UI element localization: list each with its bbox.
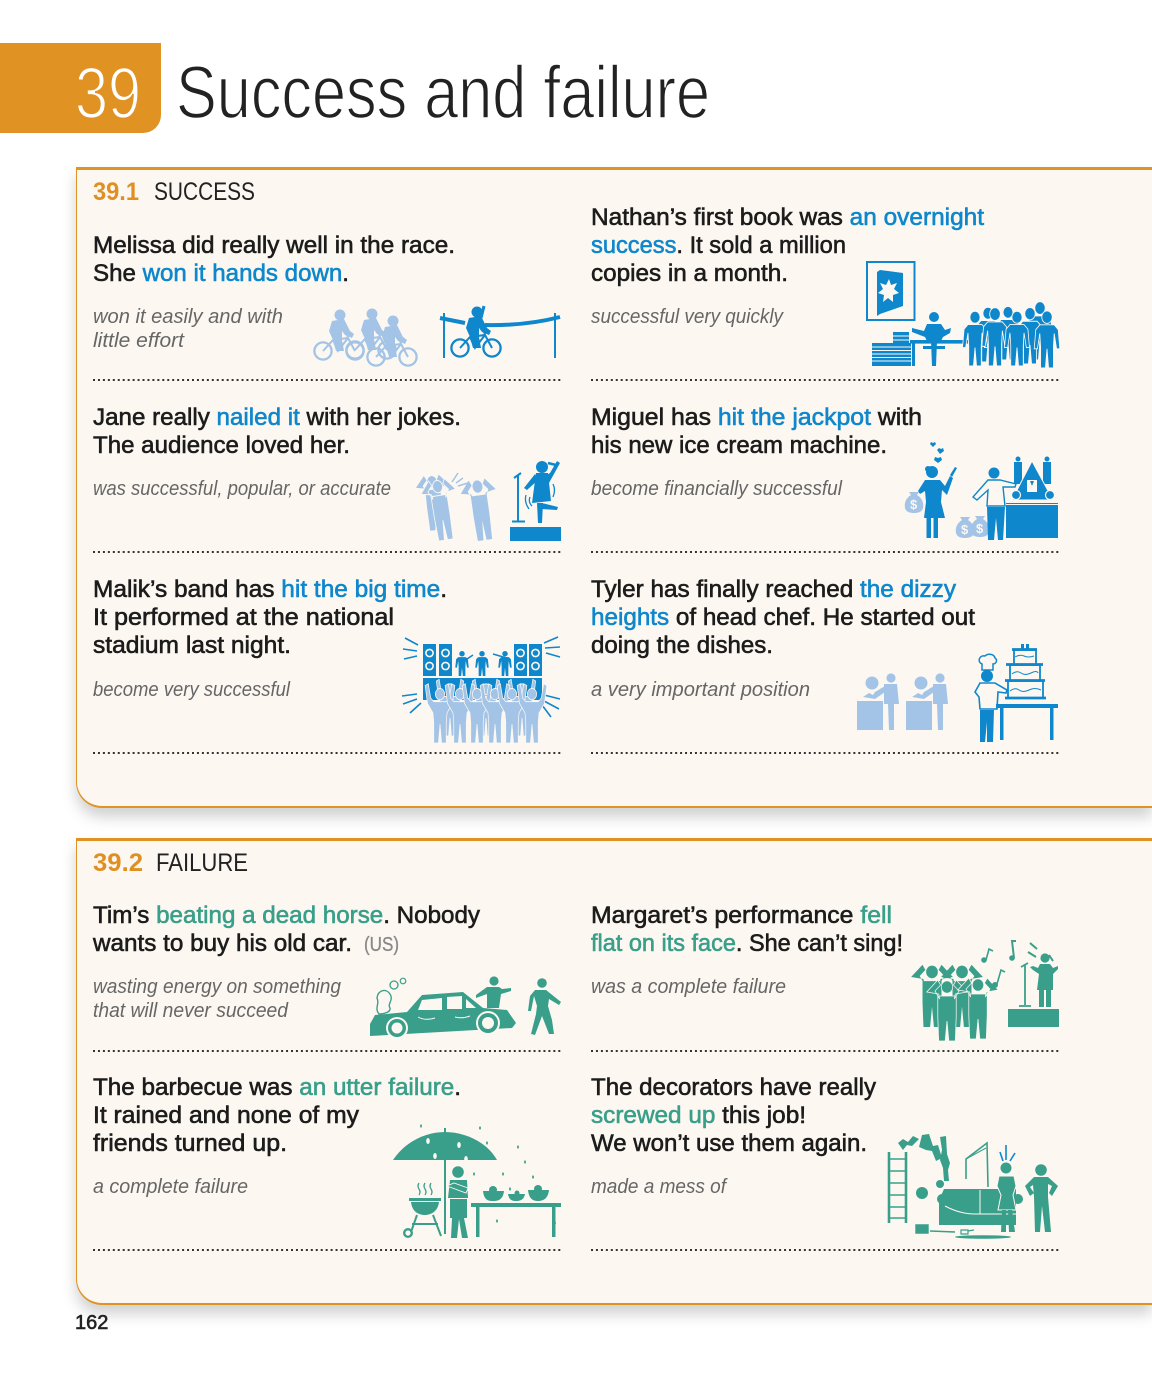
- gloss: made a mess of: [590, 1175, 728, 1198]
- sentence: Tyler has finally reached the dizzy: [590, 576, 956, 603]
- panel: 39.1 success: [76, 167, 1152, 808]
- entry: an overnight success: [590, 204, 1059, 368]
- sentence: [92, 1074, 460, 1157]
- gloss: little effort: [92, 329, 185, 352]
- sentence: Miguel has hit the jackpot with: [590, 404, 921, 431]
- sentence: his new ice cream machine.: [590, 432, 886, 459]
- gloss: become very successful: [92, 678, 291, 701]
- gloss: that will never succeed: [92, 999, 288, 1022]
- sentence: [590, 1074, 876, 1157]
- entry: hit the big time: [92, 576, 560, 743]
- sentence: stadium last night.: [92, 632, 290, 659]
- section heading: 39.2: 39.2: [92, 849, 142, 877]
- section heading: 39.2: [92, 849, 248, 877]
- gloss: was a complete failure: [590, 975, 786, 998]
- icon: inventor, machine, ice cream customer and money bags: $: [910, 497, 918, 512]
- gloss: [92, 305, 282, 352]
- sentence: [590, 576, 975, 659]
- sentence: The audience loved her.: [92, 432, 350, 459]
- sentence: Jane really nailed it with her jokes.: [92, 404, 460, 431]
- sentence: Margaret’s performance fell: [590, 902, 892, 929]
- section heading: 39.1: [92, 178, 254, 206]
- sentence: heights of head chef. He started out: [590, 604, 975, 631]
- icon: rained-out barbecue: [392, 1124, 560, 1238]
- gloss: wasting energy on something: [92, 975, 341, 998]
- sentence: Melissa did really well in the race.: [92, 232, 454, 259]
- sentence: [92, 232, 454, 287]
- icon: book signing with a crowd: [866, 262, 1059, 368]
- sentence: success. It sold a million: [590, 232, 846, 259]
- sentence: [92, 404, 460, 459]
- icon: inventor, machine, ice cream customer and money bags: $: [960, 522, 968, 537]
- icon: band on stage with cheering crowd: [402, 637, 560, 743]
- gloss: won it easily and with: [92, 305, 282, 328]
- icon: bad singer and audience covering ears: [911, 941, 1058, 1041]
- sentence: screwed up this job!: [590, 1102, 806, 1129]
- gloss: [92, 975, 341, 1022]
- sentence: It rained and none of my: [92, 1102, 358, 1129]
- sentence: doing the dishes.: [590, 632, 772, 659]
- entry: the dizzy heights: [590, 576, 1058, 742]
- icon: cyclists and winner at finish tape: [314, 306, 560, 366]
- entry: screwed up: [590, 1074, 1058, 1239]
- icon: inventor, machine, ice cream customer and money bags: [904, 442, 1058, 540]
- gloss: a complete failure: [92, 1175, 248, 1198]
- entry: beating a dead horse: [91, 902, 561, 1039]
- sentence: The barbecue was an utter failure.: [92, 1074, 460, 1101]
- entry: won it hands down: [92, 232, 560, 366]
- entry: nailed it: [92, 404, 560, 543]
- title: Success and failure: [176, 51, 710, 134]
- gloss: was successful, popular, or accurate: [92, 477, 390, 500]
- sentence: [590, 204, 984, 287]
- icon: inventor, machine, ice cream customer and money bags: $: [976, 521, 984, 536]
- sentence: We won’t use them again.: [590, 1130, 866, 1157]
- sentence: wants to buy his old car.: [91, 930, 352, 957]
- section heading: 39.1: 39.1: [92, 178, 139, 206]
- entry: an utter failure: [92, 1074, 560, 1238]
- sentence: friends turned up.: [92, 1130, 286, 1157]
- sentence: She won it hands down.: [92, 260, 348, 287]
- page number: 162: [75, 1312, 108, 1334]
- sentence: [590, 902, 902, 957]
- sentence: It performed at the national: [92, 604, 394, 631]
- gloss: a very important position: [590, 678, 810, 701]
- icon: broken-down car and walking man: [370, 976, 560, 1039]
- sentence: Malik’s band has hit the big time.: [92, 576, 446, 603]
- sentence: Tim’s beating a dead horse. Nobody: [92, 902, 480, 929]
- chapter number tab: [0, 43, 161, 133]
- sentence: The decorators have really: [590, 1074, 876, 1101]
- sentence: copies in a month.: [590, 260, 788, 287]
- sentence: [91, 902, 480, 957]
- panel: 39.2 failure: [76, 838, 1152, 1305]
- entry: fell flat on its face: [590, 902, 1058, 1041]
- sentence: (US): [364, 934, 398, 956]
- icon: dishwashers and head chef with wedding cake: [856, 644, 1058, 742]
- icon: decorators' ruined room: [888, 1134, 1058, 1239]
- sentence: Nathan’s first book was an overnight: [590, 204, 984, 231]
- gloss: successful very quickly: [590, 305, 784, 328]
- sentence: [92, 576, 446, 659]
- entry: hit the jackpot: [590, 404, 1058, 540]
- chapter number: 39: [75, 54, 141, 134]
- gloss: become financially successful: [590, 477, 843, 500]
- sentence: [590, 404, 921, 459]
- section heading: 39.1: SUCCESS: [154, 178, 254, 206]
- section heading: 39.2: FAILURE: [156, 849, 248, 877]
- sentence: flat on its face. She can’t sing!: [590, 930, 902, 957]
- icon: comedian on stage with laughing audience: [414, 461, 560, 543]
